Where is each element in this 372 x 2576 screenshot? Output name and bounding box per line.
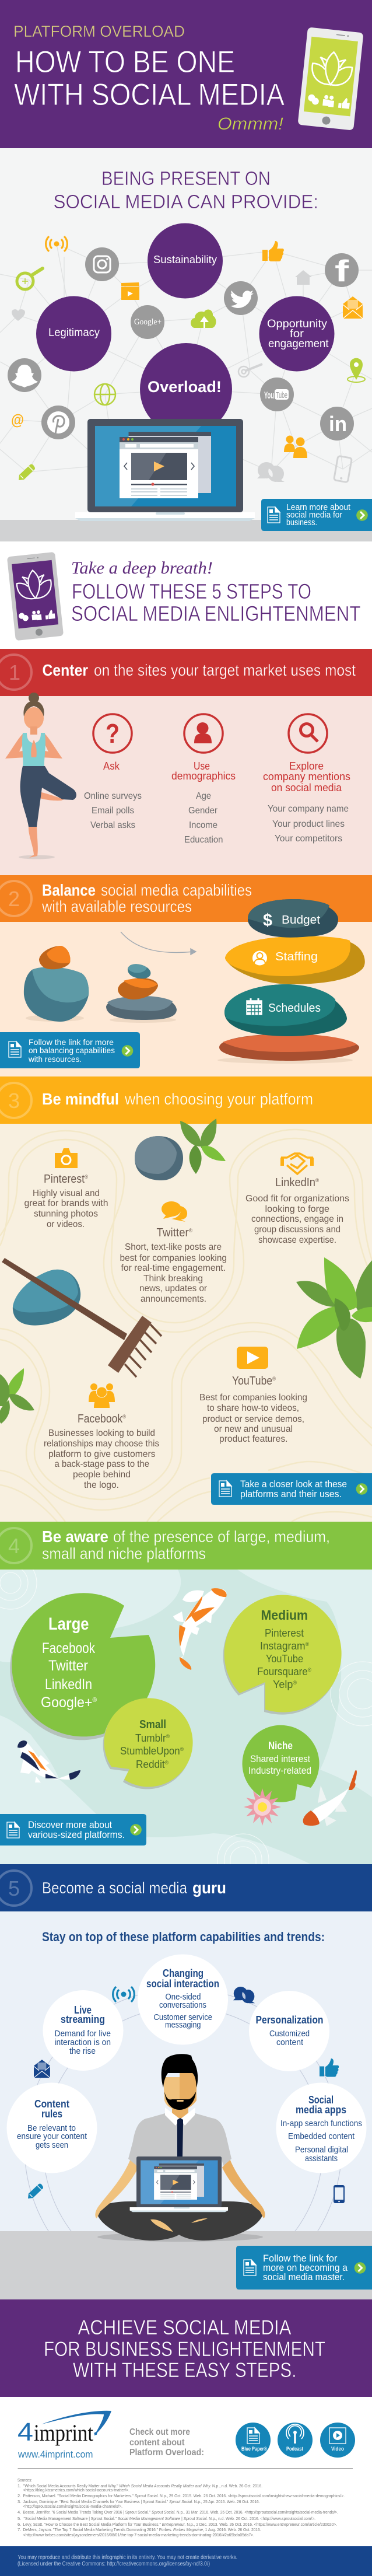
- sources: 7.: [17, 2527, 21, 2532]
- bubble: changing social interaction: social interaction: [146, 1978, 219, 1990]
- column: Ask: ?: [106, 718, 120, 749]
- platform: LinkedIn: Good fit for organizations: [245, 1194, 349, 1204]
- platform: LinkedIn: group discussions and: [254, 1225, 341, 1235]
- lily pad: Medium: [223, 1595, 342, 1715]
- lily pad: Small: Tumblr: [135, 1732, 167, 1744]
- intro to steps panel: [0, 541, 372, 649]
- left plant: [0, 1368, 34, 1424]
- column: Use demographics: demographics: [171, 770, 236, 782]
- step 2 header: social media capabilities: [101, 881, 252, 899]
- bubble: social media apps: Personal digital: [295, 2145, 348, 2155]
- lily pad: Small: ®: [180, 1746, 184, 1752]
- bubble: personalization: Customized: [269, 2029, 310, 2039]
- platform: Facebook: Businesses looking to build: [48, 1428, 155, 1438]
- bubble: changing social interaction: Changing: [163, 1967, 203, 1979]
- platform: YouTube: product or service demos,: [202, 1414, 304, 1424]
- icon: orange koi: [173, 1588, 227, 1670]
- panel: step 2: [0, 875, 372, 1076]
- icon: broadcast: [113, 1987, 134, 2002]
- man's laptop: [130, 2156, 228, 2212]
- icon: podcast: [278, 2423, 313, 2458]
- column: Ask: Ask: [103, 760, 120, 772]
- link: discover more: [0, 1814, 146, 1846]
- logo: 4imprint: [17, 2411, 111, 2460]
- benefit bubble: Opportunity for engagement: for: [290, 328, 304, 340]
- link: learn more: business.: [286, 518, 317, 527]
- lily pad: Large: [10, 1593, 155, 1740]
- platform: Facebook: people behind: [73, 1470, 131, 1480]
- benefit bubble: Overload: [140, 343, 232, 435]
- lily pad: Small: StumbleUpon: [120, 1745, 184, 1757]
- icon: video clapper: [121, 282, 139, 300]
- lily pad: Medium: YouTube: [266, 1653, 303, 1665]
- closing banner: [0, 2299, 372, 2397]
- bubble: live streaming: [43, 1990, 124, 2071]
- stone: budget: [248, 899, 338, 938]
- column: Use demographics: Use: [194, 760, 210, 772]
- lily pad: Medium: Instagram: [260, 1640, 307, 1652]
- bubble: live streaming: interaction is on: [55, 2038, 111, 2047]
- bubble: live streaming: the rise: [69, 2047, 96, 2056]
- icon: globe: [94, 384, 115, 405]
- platform: Facebook: ®: [122, 1414, 126, 1420]
- lily pad: Medium: Foursquare: [257, 1666, 311, 1677]
- logo: 4imprint: 4: [17, 2418, 33, 2446]
- main title: [14, 45, 285, 112]
- step 5 header: Become a social media: [42, 1879, 187, 1897]
- bubble: social media apps: media apps: [296, 2104, 346, 2116]
- platform: Facebook: Facebook: [78, 1413, 129, 1425]
- column: Use demographics: Age: [196, 791, 211, 801]
- bubble: social media apps: assistants: [305, 2154, 338, 2163]
- column: Explore company mentions: Your competitors: [275, 834, 342, 844]
- icon: target: [238, 364, 262, 377]
- check out more text: Platform Overload:: [129, 2448, 204, 2458]
- link: balancing capabilities: on balancing capabilities: [29, 1046, 115, 1055]
- header kicker: PLATFORM OVERLOAD: [13, 22, 185, 40]
- benefit bubble: Opportunity for engagement: engagement: [268, 338, 329, 350]
- bubble: social media apps: In-app search functions: [280, 2119, 362, 2128]
- column: Use demographics: [171, 714, 236, 845]
- panel: step 1: [0, 649, 372, 875]
- sources: 4.: [17, 2509, 21, 2515]
- license bar: (Licensed under the Creative Commons: http://creativecommons.org/licenses/by-nd/3.0/): [17, 2561, 210, 2567]
- lily pad: Niche: Industry-related: [248, 1765, 311, 1776]
- sources: Beese, Jennifer. "6 Social Media Trends Taking Over 2016 | Sprout Social." Sprout Social. N.p., 31 Mar. 2016. Web. 26 Oct. 2016. <http://sproutsocial.com/insights/social-media-trends/>.: [23, 2509, 338, 2515]
- icon: Pinterest: [41, 406, 75, 439]
- bubble: social media apps: [276, 2083, 366, 2173]
- platform: LinkedIn: LinkedIn: [275, 1176, 320, 1189]
- stone: staffing: Staffing: [275, 950, 318, 963]
- step 2 header: 2: [8, 887, 20, 911]
- laptop: [75, 419, 255, 521]
- sources: Levy, Scott. "How to Choose the Best Social Media Platform for Your Business." Entrepreneur. N.p., 2 Dec. 2013. Web. 26 Oct. 2016. <https://www.entrepreneur.com/article/230020>.: [23, 2522, 337, 2527]
- icon: map pin: [348, 358, 365, 382]
- link: closer look: [211, 1473, 372, 1505]
- closing banner: FOR BUSINESS ENLIGHTENMENT: [44, 2338, 325, 2361]
- step 4 header: [0, 1522, 372, 1570]
- platform: Twitter: news, updates or: [139, 1284, 208, 1294]
- stone: schedules: [224, 984, 347, 1036]
- column: Explore company mentions: [263, 714, 350, 844]
- icon: video: [320, 2423, 355, 2458]
- platform: Twitter: ®: [189, 1228, 192, 1233]
- sources: "Social Media Management Software | Sprout Social." Social Media Management Software | Sprout Social. N.p., n.d. Web. 26 Oct. 2016. <http://www.sproutsocial.com/>.: [23, 2516, 315, 2521]
- platform: LinkedIn: looking to forge: [265, 1204, 329, 1214]
- icon: phone with lotus: [297, 27, 364, 131]
- benefit bubble: Sustainability: [148, 223, 223, 299]
- platform: Pinterest: or videos.: [47, 1219, 85, 1229]
- link: learn more: Learn more about: [286, 502, 351, 512]
- license bar: You may reproduce and distribute this infographic in its entirety. You may not create derivative works.: [17, 2554, 237, 2561]
- link: closer look: platforms and their uses.: [240, 1489, 342, 1500]
- script line: Take a deep breath!: [71, 558, 213, 578]
- stone: budget: $: [263, 911, 272, 930]
- icon: house: [295, 270, 312, 285]
- small unbalanced stones: [24, 946, 177, 1023]
- step 4 header: small and niche platforms: [42, 1544, 206, 1563]
- icon: envelope: [34, 2060, 50, 2078]
- platform: YouTube: product features.: [219, 1434, 288, 1444]
- icon: Snapchat: [8, 358, 41, 392]
- column: Explore company mentions: Explore: [289, 760, 324, 772]
- link: becoming a master: [236, 2246, 372, 2290]
- column: Ask: Online surveys: [84, 791, 142, 801]
- link: learn more: [261, 499, 372, 531]
- platform: LinkedIn: ®: [315, 1177, 319, 1183]
- icon: YouTube: [260, 378, 294, 411]
- column: Use demographics: Income: [189, 820, 217, 830]
- lily pad: Small: ®: [165, 1760, 169, 1766]
- step 3 header: Be mindful: [42, 1090, 119, 1108]
- bubble: changing social interaction: Customer service: [154, 2013, 212, 2022]
- lily pad: Large: ®: [92, 1697, 97, 1704]
- column: Explore company mentions: Your product lines: [272, 819, 345, 829]
- sources: Sources:: [17, 2477, 32, 2483]
- icon: thumb: [262, 241, 284, 261]
- lily pad: Medium: Pinterest: [265, 1627, 304, 1639]
- lily pad: Large: Large: [48, 1614, 89, 1634]
- right plant: [296, 1257, 372, 1379]
- step 4 header: 4: [8, 1534, 20, 1558]
- stone: budget: Budget: [282, 914, 320, 927]
- bubble: changing social interaction: conversations: [159, 2001, 206, 2010]
- icon: chat bubbles: [233, 1987, 255, 2003]
- lily pad: Large: Facebook: [42, 1640, 95, 1656]
- sources: 6.: [17, 2522, 21, 2527]
- icon: dark koi: [17, 1740, 80, 1782]
- bubble: personalization: [249, 1991, 329, 2071]
- benefit bubble: Opportunity for engagement: Opportunity: [267, 318, 328, 330]
- platform: YouTube: ®: [272, 1376, 276, 1382]
- step 4 header: of the presence of large, medium,: [113, 1528, 330, 1546]
- lily pad: Medium: Yelp: [273, 1679, 293, 1690]
- step 1 header: [0, 649, 372, 696]
- main title: HOW TO BE ONE: [15, 45, 235, 79]
- step 3 header: when choosing your platform: [124, 1090, 313, 1108]
- icon: blue paper: [236, 2423, 271, 2458]
- platform: Facebook: relationships may choose this: [44, 1439, 159, 1449]
- column: Explore company mentions: on social media: [271, 782, 342, 794]
- bubble: live streaming: Demand for live: [55, 2029, 111, 2039]
- large balanced stones with labels: [217, 899, 365, 1064]
- platform: Pinterest: ®: [85, 1174, 88, 1180]
- lily pad: Niche: Niche: [268, 1740, 293, 1752]
- bubble: content rules: ensure your content: [17, 2132, 87, 2141]
- platform: Pinterest: stunning photos: [34, 1209, 98, 1219]
- main title: WITH SOCIAL MEDIA: [14, 78, 285, 112]
- icon: blue paper: Blue Paper®: [241, 2446, 267, 2452]
- lily pad: Medium: ®: [308, 1667, 311, 1673]
- platform: Pinterest: Highly visual and: [33, 1189, 100, 1198]
- step 2 header: with available resources: [41, 897, 192, 915]
- sources: <http://www.forbes.com/sites/jaysondemers/2016/08/01/the-top-7-social-media-marketing-trends-dominating-2016/#2a69bda05da7>.: [23, 2532, 254, 2537]
- benefit bubble: Legitimacy: [36, 296, 111, 371]
- link: becoming a master: more on becoming a: [263, 2262, 348, 2273]
- sources: 5.: [17, 2516, 21, 2521]
- lily pad: Large: Google+: [41, 1694, 96, 1711]
- link: discover more: Discover more about: [28, 1819, 112, 1830]
- lily pad: Niche: Shared interest: [250, 1753, 310, 1764]
- icon: white koi: [303, 1770, 357, 1826]
- step 5 header: guru: [192, 1879, 226, 1897]
- icon: Google+: [131, 305, 164, 339]
- teal stone: [13, 1270, 80, 1326]
- rake: [2, 1258, 162, 1377]
- icon: video: Video: [331, 2446, 344, 2452]
- icon: YouTube: You: [264, 390, 274, 401]
- link: becoming a master: social media master.: [263, 2271, 345, 2283]
- meditating man figure: [95, 2054, 265, 2242]
- panel: being present on social media: [0, 148, 372, 541]
- slate stone with leaves: [135, 1119, 226, 1180]
- sources: <http://sproutsocial.com/insights/social-media-channels/>.: [23, 2504, 122, 2509]
- platform: LinkedIn: [245, 1154, 349, 1245]
- platform: Twitter: announcements.: [141, 1294, 206, 1304]
- bubble: content rules: Be relevant to: [27, 2124, 76, 2133]
- sources: [17, 2477, 345, 2537]
- icon: Facebook: f: [335, 254, 349, 288]
- bubble: changing social interaction: [138, 1955, 228, 2044]
- license bar: [0, 2546, 372, 2576]
- link: learn more: social media for: [286, 510, 342, 520]
- yoga woman figure: [5, 693, 76, 859]
- platform: Twitter: best for companies looking: [120, 1253, 227, 1263]
- icon: pencil: [28, 2183, 43, 2198]
- icon: mobile phone: [334, 2185, 345, 2203]
- platform: YouTube: [199, 1347, 307, 1444]
- logo: 4imprint: imprint: [34, 2420, 93, 2446]
- bubble: content rules: gets seen: [36, 2141, 68, 2150]
- icon: people: [284, 435, 307, 458]
- column: Ask: Email polls: [92, 806, 134, 816]
- icon: Google+: Google+: [134, 317, 162, 327]
- platform: Twitter: Think breaking: [143, 1274, 203, 1284]
- icon: LinkedIn: [320, 407, 354, 441]
- column: Explore company mentions: company mentions: [263, 771, 350, 782]
- column: Explore company mentions: Your company name: [268, 804, 349, 814]
- icon: Instagram: [85, 247, 119, 281]
- icon: mobile phone: [334, 456, 352, 483]
- lily pad: Small: Reddit: [136, 1759, 166, 1770]
- icon: YouTube: Tube: [276, 390, 287, 400]
- step 5 header: 5: [8, 1876, 20, 1900]
- bubble: content rules: Content: [34, 2098, 69, 2110]
- platform: YouTube: to share how-to videos,: [207, 1403, 299, 1413]
- step 3 header: 3: [8, 1089, 20, 1113]
- bubble: personalization: content: [276, 2038, 303, 2047]
- step 3 header: [0, 1076, 372, 1124]
- stone: staffing: [225, 936, 365, 984]
- platform: LinkedIn: connections, engage in: [251, 1214, 343, 1224]
- logo: 4imprint: www.4imprint.com: [17, 2449, 93, 2460]
- arrow: [121, 932, 196, 955]
- platform: YouTube: or new and unusual: [214, 1424, 293, 1434]
- lily pad: Small: [103, 1698, 193, 1789]
- lily pad: Small: Small: [139, 1718, 166, 1731]
- icon: heart: [12, 309, 25, 321]
- platform: Twitter: for real-time engagement.: [121, 1263, 226, 1273]
- platform: Facebook: a back-stage pass to the: [55, 1459, 149, 1469]
- bubble: personalization: Personalization: [255, 2014, 323, 2026]
- column: Use demographics: Education: [184, 835, 223, 845]
- icon: thumb: [320, 2058, 339, 2077]
- check out more text: [129, 2427, 204, 2458]
- benefit bubble: Sustainability: Sustainability: [153, 254, 217, 265]
- link: discover more: various-sized platforms.: [28, 1829, 125, 1840]
- platform: Twitter: Twitter: [156, 1226, 191, 1239]
- sources: 3.: [17, 2499, 21, 2504]
- floor: [0, 520, 372, 541]
- link: balancing capabilities: Follow the link for more: [29, 1037, 114, 1047]
- platform: Pinterest: [24, 1148, 108, 1229]
- subheading: Stay on top of these platform capabilities and trends:: [42, 1930, 325, 1944]
- platform: YouTube: Best for companies looking: [199, 1393, 307, 1403]
- column: Use demographics: Gender: [188, 806, 218, 816]
- platform: Pinterest: great for brands with: [24, 1198, 108, 1208]
- icon: at sign: @: [11, 411, 24, 428]
- lily pad: Large: Twitter: [48, 1658, 88, 1674]
- heading: [54, 167, 318, 212]
- sources: Jackson, Dominique. "Best Social Media Channels for Your Business | Sprout Social." Sprout Social. N.p., 25 Apr. 2016. Web. 26 Oct. 2016.: [23, 2499, 260, 2504]
- bubble: live streaming: streaming: [61, 2014, 105, 2025]
- link: balancing capabilities: [0, 1032, 140, 1068]
- check out more text: content about: [129, 2438, 185, 2448]
- link: closer look: Take a closer look at these: [240, 1479, 347, 1490]
- icon: Facebook: [325, 253, 359, 288]
- column: Ask: Verbal asks: [90, 820, 135, 830]
- lily pad: Medium: ®: [293, 1680, 297, 1686]
- lily pad: Medium: Medium: [261, 1607, 308, 1623]
- step 2 header: Balance: [42, 881, 96, 899]
- heading: FOLLOW THESE 5 STEPS TO: [72, 579, 311, 603]
- closing banner: WITH THESE EASY STEPS.: [73, 2359, 296, 2382]
- closing banner: ACHIEVE SOCIAL MEDIA: [78, 2316, 292, 2339]
- stone: base: [219, 1034, 359, 1061]
- heading: SOCIAL MEDIA CAN PROVIDE:: [54, 191, 318, 212]
- step 1 header: 1: [9, 660, 20, 684]
- platform: LinkedIn: showcase expertise.: [258, 1235, 336, 1245]
- lily pad: Small: ®: [166, 1733, 170, 1739]
- panel: step 3: [0, 1076, 372, 1522]
- icon: broadcast: [46, 236, 67, 251]
- platform: Twitter: Short, text-like posts are: [125, 1242, 222, 1252]
- bubble: content rules: rules: [41, 2108, 62, 2120]
- lily pad: Niche: [243, 1725, 320, 1802]
- step 2 header: [0, 875, 372, 922]
- column: Ask: [84, 714, 142, 830]
- platform: Facebook: the logo.: [84, 1480, 119, 1490]
- header panel: [0, 0, 372, 148]
- step 5 header: [0, 1864, 372, 1911]
- sources: <https://blog.kissmetrics.com/which-social-accounts-matter/>.: [23, 2487, 129, 2493]
- sources: 2.: [17, 2493, 21, 2498]
- platform: YouTube: YouTube: [232, 1375, 278, 1387]
- platform: Facebook: platform to give customers: [48, 1449, 155, 1459]
- platform: Pinterest: Pinterest: [44, 1173, 90, 1186]
- stone: schedules: Schedules: [268, 1002, 321, 1015]
- sources: Patterson, Michael. "Social Media Demographics for Marketers." Sprout Social. N.p., 29 Oct. 2015. Web. 26 Oct. 2016. <http://sproutsocial.com/insights/new-social-media-demographics/>.: [23, 2493, 345, 2498]
- bubble: content rules: [7, 2083, 97, 2173]
- icon: pencil: [19, 464, 35, 480]
- icon: lotus flower: [244, 1788, 281, 1826]
- bubble: social media apps: Embedded content: [288, 2132, 355, 2141]
- lily pad: Medium: ®: [306, 1641, 309, 1647]
- icon: magnifier: [17, 268, 43, 289]
- platform: Facebook: [44, 1383, 159, 1490]
- icon: podcast: Podcast: [286, 2446, 304, 2452]
- bubble: changing social interaction: One-sided: [166, 1993, 201, 2002]
- link: becoming a master: Follow the link for: [263, 2253, 338, 2264]
- step 1 header: Center: [42, 661, 88, 679]
- icon: cloud upload: [191, 309, 216, 328]
- benefit bubble: Overload: Overload!: [148, 378, 222, 396]
- heading: [71, 579, 361, 625]
- Ommm script: Ommm!: [217, 114, 284, 134]
- icon: envelope: [343, 296, 363, 319]
- bubble: live streaming: Live: [74, 2004, 92, 2016]
- check out more text: Check out more: [129, 2427, 190, 2437]
- bubble: changing social interaction: messaging: [165, 2021, 201, 2030]
- icon: chat bubbles: [257, 462, 285, 482]
- sources: 1.: [17, 2483, 21, 2488]
- floor: [0, 2231, 372, 2299]
- step 4 header: Be aware: [42, 1528, 108, 1546]
- bubble: social media apps: Social: [308, 2094, 334, 2106]
- sources: "Which Social Media Accounts Really Matter and Why." Which Social Media Accounts Really Matter and Why. N.p., n.d. Web. 26 Oct. 2016.: [23, 2483, 262, 2488]
- icon: small phone: [7, 552, 64, 641]
- benefit bubble: Opportunity for engagement: [259, 296, 335, 371]
- icon: LinkedIn: in: [329, 412, 347, 436]
- benefit bubble: Legitimacy: Legitimacy: [48, 327, 100, 339]
- link: balancing capabilities: with resources.: [28, 1054, 82, 1064]
- panel: step 5: [0, 1864, 372, 2306]
- sources: DeMers, Jayson. "The Top 7 Social Media Marketing Trends Dominating 2016." Forbes. Forbes Magazine, 1 Aug. 2016. Web. 26 Oct. 2016.: [23, 2527, 261, 2532]
- platform: Twitter: [120, 1201, 227, 1304]
- icon: Twitter: [224, 281, 258, 315]
- heading: BEING PRESENT ON: [101, 167, 271, 189]
- lily pad: Large: LinkedIn: [45, 1676, 92, 1693]
- footer panel: [0, 2397, 372, 2547]
- panel: step 4: [0, 1522, 372, 1864]
